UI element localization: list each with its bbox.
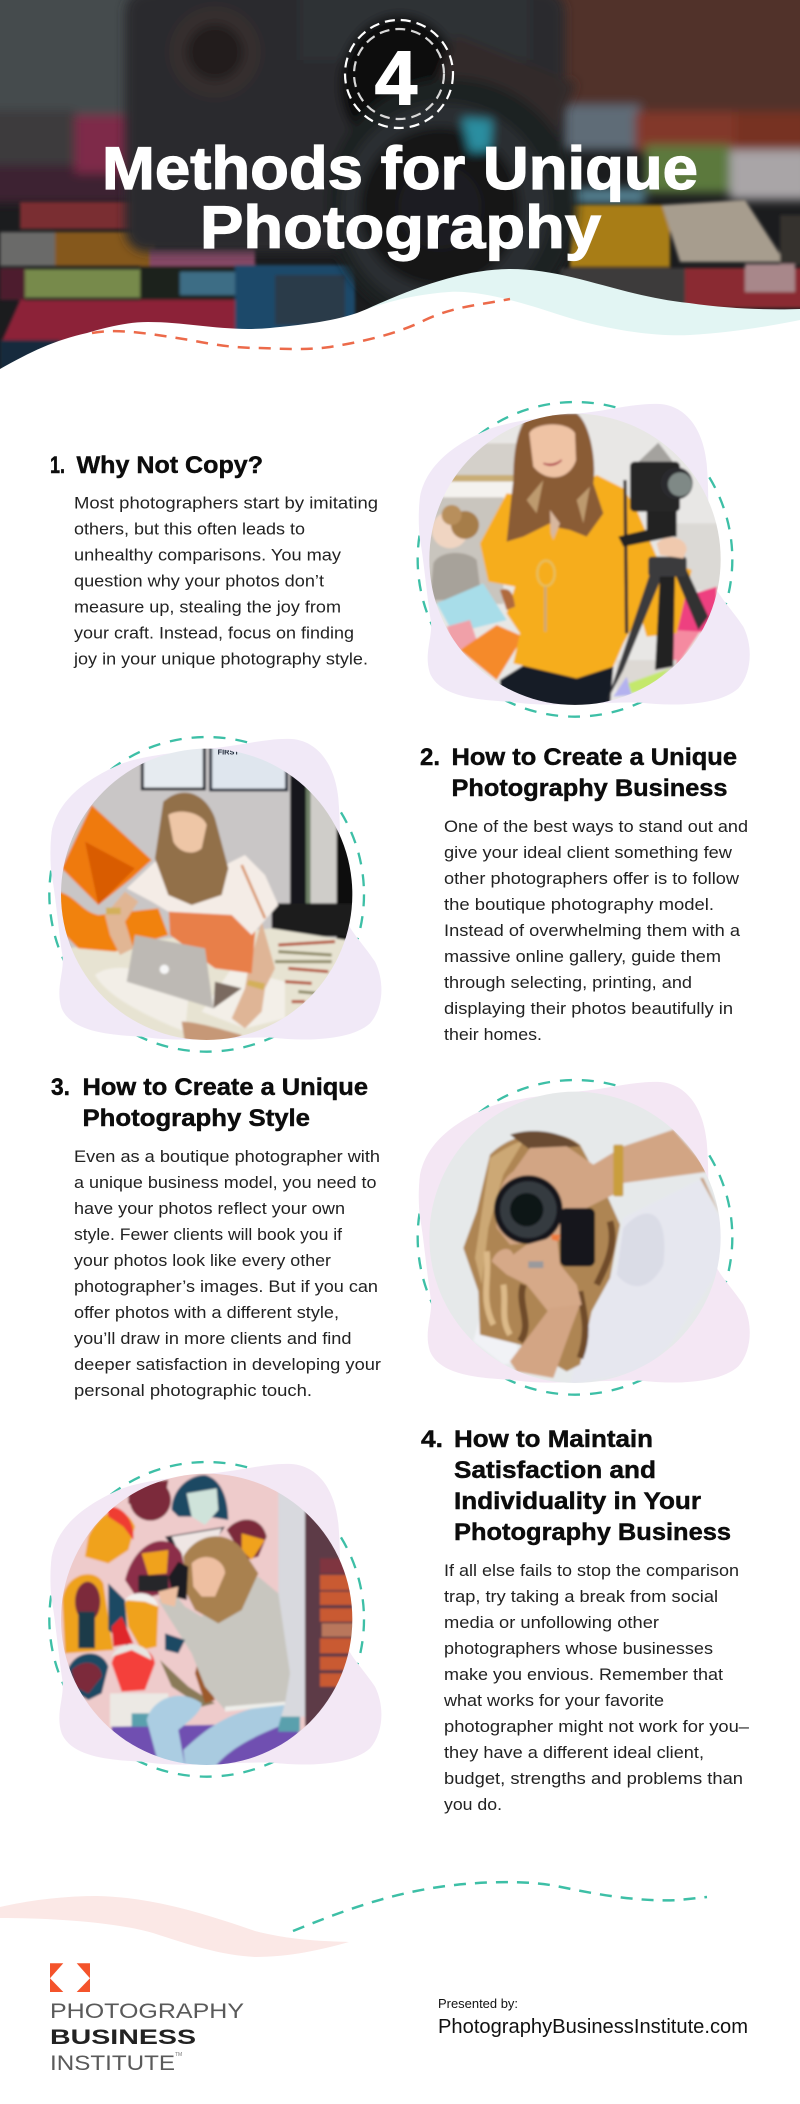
- section 4 text: How to Maintain Satisfaction and Individuality: trap, try taking a break from social: [444, 1588, 718, 1606]
- header wave: white layer: [0, 292, 800, 380]
- section 3 text: How to Create a Unique Photography Style: offer photos with a different style,: [74, 1304, 339, 1322]
- logo: Photography Business Institute: TM: [175, 2052, 182, 2058]
- section 4 text: How to Maintain Satisfaction and Individuality: [421, 1426, 750, 1814]
- orange dashed wave: [92, 299, 510, 349]
- section 3 text: How to Create a Unique Photography Style: personal photographic touch.: [74, 1382, 312, 1400]
- section 3 text: How to Create a Unique Photography Style: photographer’s images. But if you can: [74, 1278, 378, 1296]
- section 3 text: How to Create a Unique Photography Style: How to Create a Unique: [82, 1074, 368, 1101]
- section 3 text: How to Create a Unique Photography Style: Even as a boutique photographer with: [74, 1148, 380, 1166]
- presented by: [438, 1996, 748, 2038]
- photo 4: woman photographing in front of a mural: [42, 1460, 381, 1780]
- section 4 text: How to Maintain Satisfaction and Individuality: media or unfollowing other: [444, 1614, 660, 1632]
- section 1 text: Why Not Copy?: others, but this often leads to: [74, 520, 305, 538]
- section 3 text: How to Create a Unique Photography Style: your photos look like every other: [74, 1252, 332, 1270]
- section 1 text: Why Not Copy?: 1.: [50, 452, 65, 479]
- section 3 text: How to Create a Unique Photography Style: deeper satisfaction in developing your: [74, 1356, 382, 1374]
- title: Photography: [200, 194, 602, 261]
- section 1 text: Why Not Copy?: measure up, stealing the joy from: [74, 598, 341, 616]
- title: Methods for Unique: [102, 135, 698, 202]
- section 2 text: How to Create a Unique Photography Business: their homes.: [444, 1026, 542, 1044]
- section 1 text: Why Not Copy?: unhealthy comparisons. You may: [74, 546, 342, 564]
- section 4 text: How to Maintain Satisfaction and Individuality: they have a different ideal client,: [444, 1744, 704, 1762]
- presented by: Presented by:: [438, 1996, 518, 2011]
- photo 3: woman holding camera to her face: [410, 1078, 750, 1398]
- section 3 text: How to Create a Unique Photography Style: a unique business model, you need to: [74, 1174, 376, 1192]
- section 2 text: How to Create a Unique Photography Business: One of the best ways to stand out and: [444, 818, 748, 836]
- logo: Photography Business Institute: PHOTOGRAPHY: [50, 2000, 244, 2023]
- logo icon: orange brackets: [50, 1963, 90, 1992]
- section 2 text: How to Create a Unique Photography Business: other photographers offer is to follow: [444, 870, 739, 888]
- photo 2: woman with laptop on orange chair: FIRST: [218, 747, 239, 756]
- section 2 text: How to Create a Unique Photography Business: Instead of overwhelming them with a: [444, 922, 741, 940]
- section 2 text: How to Create a Unique Photography Business: give your ideal client something few: [444, 844, 732, 862]
- section 3 text: How to Create a Unique Photography Style: Photography Style: [82, 1105, 310, 1132]
- header wave: pale teal layer: [340, 269, 800, 345]
- section 4 text: How to Maintain Satisfaction and Individuality: Individuality in Your: [454, 1488, 701, 1515]
- section 2 text: How to Create a Unique Photography Business: How to Create a Unique: [452, 744, 737, 771]
- section 2 text: How to Create a Unique Photography Business: 2.: [420, 744, 440, 771]
- photo 1: woman in yellow blouse with camera on tripod: [410, 400, 750, 720]
- section 2 text: How to Create a Unique Photography Business: through selecting, printing, and: [444, 974, 692, 992]
- section 1 text: Why Not Copy?: question why your photos don’t: [74, 572, 324, 590]
- section 4 text: How to Maintain Satisfaction and Individuality: you do.: [444, 1796, 502, 1814]
- section 2 text: How to Create a Unique Photography Business: massive online gallery, guide them: [444, 948, 721, 966]
- section 2 text: How to Create a Unique Photography Business: the boutique photography model.: [444, 896, 714, 914]
- title: [102, 135, 698, 261]
- section 1 text: Why Not Copy?: Why Not Copy?: [76, 452, 263, 479]
- section 1 text: Why Not Copy?: [50, 452, 378, 668]
- section 3 text: How to Create a Unique Photography Style: [51, 1074, 382, 1400]
- section 1 text: Why Not Copy?: your craft. Instead, focus on finding: [74, 624, 354, 642]
- section 4 text: How to Maintain Satisfaction and Individuality: Satisfaction and: [454, 1457, 656, 1484]
- section 4 text: How to Maintain Satisfaction and Individuality: 4.: [421, 1426, 443, 1453]
- number badge: 4 in dashed circles: [345, 20, 453, 128]
- section 3 text: How to Create a Unique Photography Style: you’ll draw in more clients and find: [74, 1330, 352, 1348]
- section 4 text: How to Maintain Satisfaction and Individuality: make you envious. Remember that: [444, 1666, 723, 1684]
- section 4 text: How to Maintain Satisfaction and Individuality: photographers whose businesses: [444, 1640, 713, 1658]
- header photo: camera on colourful table: [0, 0, 800, 374]
- section 3 text: How to Create a Unique Photography Style: 3.: [51, 1074, 70, 1101]
- section 2 text: How to Create a Unique Photography Business: [420, 744, 748, 1044]
- section 4 text: How to Maintain Satisfaction and Individuality: If all else fails to stop the comparison: [444, 1562, 739, 1580]
- section 3 text: How to Create a Unique Photography Style: have your photos reflect your own: [74, 1200, 345, 1218]
- section 2 text: How to Create a Unique Photography Business: Photography Business: [452, 775, 728, 802]
- presented by: PhotographyBusinessInstitute.com: [438, 2016, 748, 2038]
- section 3 text: How to Create a Unique Photography Style: style. Fewer clients will book you if: [74, 1226, 342, 1244]
- photo 2: woman with laptop on orange chair: [42, 735, 381, 1055]
- section 4 text: How to Maintain Satisfaction and Individuality: How to Maintain: [454, 1426, 653, 1453]
- number badge: 4 in dashed circles: 4: [375, 36, 417, 121]
- section 4 text: How to Maintain Satisfaction and Individuality: what works for your favorite: [443, 1692, 664, 1710]
- logo: Photography Business Institute: INSTITUTE: [50, 2052, 175, 2075]
- section 4 text: How to Maintain Satisfaction and Individuality: Photography Business: [454, 1519, 731, 1546]
- footer pink swoosh: [0, 1896, 349, 1957]
- section 4 text: How to Maintain Satisfaction and Individuality: budget, strengths and problems than: [444, 1770, 743, 1788]
- section 1 text: Why Not Copy?: Most photographers start by imitating: [74, 494, 378, 512]
- logo: Photography Business Institute: BUSINESS: [50, 2026, 196, 2049]
- section 4 text: How to Maintain Satisfaction and Individuality: photographer might not work for you–: [444, 1718, 750, 1736]
- logo: Photography Business Institute: [50, 1963, 244, 2075]
- section 2 text: How to Create a Unique Photography Business: displaying their photos beautifully in: [444, 1000, 733, 1018]
- footer teal dashed wave: [293, 1882, 707, 1931]
- section 1 text: Why Not Copy?: joy in your unique photography style.: [73, 650, 368, 668]
